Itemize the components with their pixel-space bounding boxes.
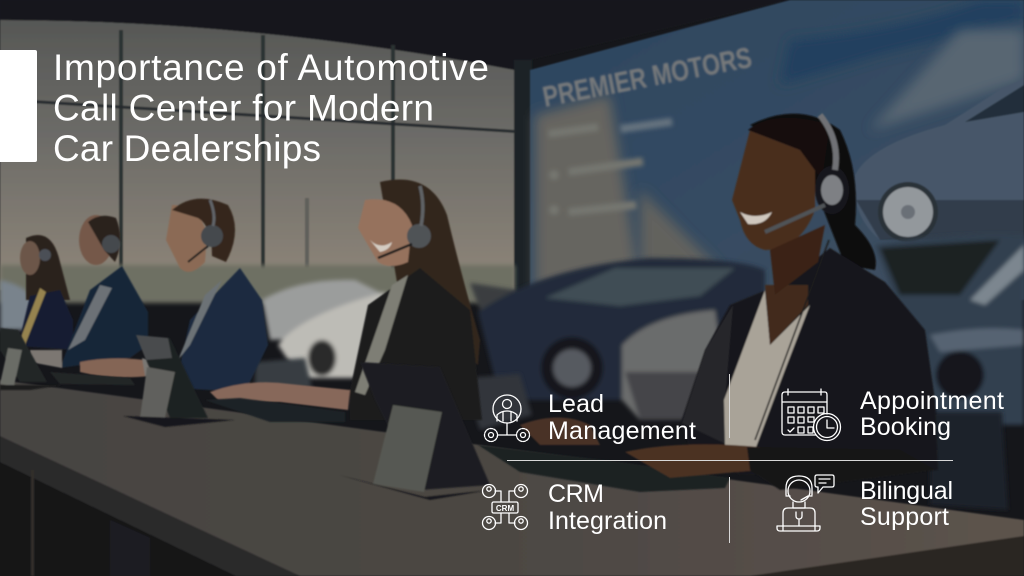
label: Appointment <box>860 387 1004 415</box>
chairs <box>255 358 1008 510</box>
title: Importance of Automotive <box>53 47 489 88</box>
showroom cars <box>0 234 1024 425</box>
terminal 3 <box>136 335 208 418</box>
label: Integration <box>548 507 667 535</box>
main agent foreground <box>520 114 938 490</box>
icon: person with gears <box>484 395 530 442</box>
dividers <box>507 374 953 543</box>
headset <box>815 166 849 214</box>
desk <box>0 380 1024 576</box>
jacket <box>680 248 938 475</box>
face <box>732 128 815 250</box>
agent 4 <box>30 215 148 368</box>
item: lead management <box>484 390 696 445</box>
icon: calendar and clock <box>782 389 840 440</box>
terminals and keyboards <box>0 328 730 500</box>
item: appointment booking <box>782 387 1004 441</box>
title: Call Center for Modern <box>53 88 434 128</box>
label <box>548 390 696 445</box>
label <box>860 477 953 531</box>
label: CRM <box>548 480 604 508</box>
white accent block <box>0 50 36 162</box>
seated agents in the background <box>18 179 482 420</box>
label <box>860 387 1004 441</box>
label: Bilingual <box>860 477 953 505</box>
title <box>53 47 489 169</box>
agent 5 <box>18 235 73 350</box>
car on screen <box>854 78 1024 240</box>
hands <box>520 418 600 445</box>
blouse <box>724 290 810 450</box>
label: Support <box>860 503 949 531</box>
label: Booking <box>860 413 951 441</box>
screen headline: PREMIER MOTORS <box>540 42 754 114</box>
windows <box>0 0 790 303</box>
video wall screen <box>530 0 1024 300</box>
agent 2 <box>210 179 482 420</box>
icon: crm network <box>482 484 528 530</box>
title: Car Dealerships <box>53 128 321 169</box>
item: crm integration <box>482 480 667 535</box>
terminal 2 <box>360 362 490 490</box>
label: Lead <box>548 390 604 418</box>
label <box>548 480 667 535</box>
label: Management <box>548 417 696 445</box>
item: crm integration: CRM <box>496 504 514 513</box>
hair braid <box>750 114 876 270</box>
icon: support agent with laptop <box>777 475 834 531</box>
agent 3 <box>80 199 268 392</box>
terminal 5 <box>0 328 47 382</box>
item: bilingual support <box>777 475 953 531</box>
